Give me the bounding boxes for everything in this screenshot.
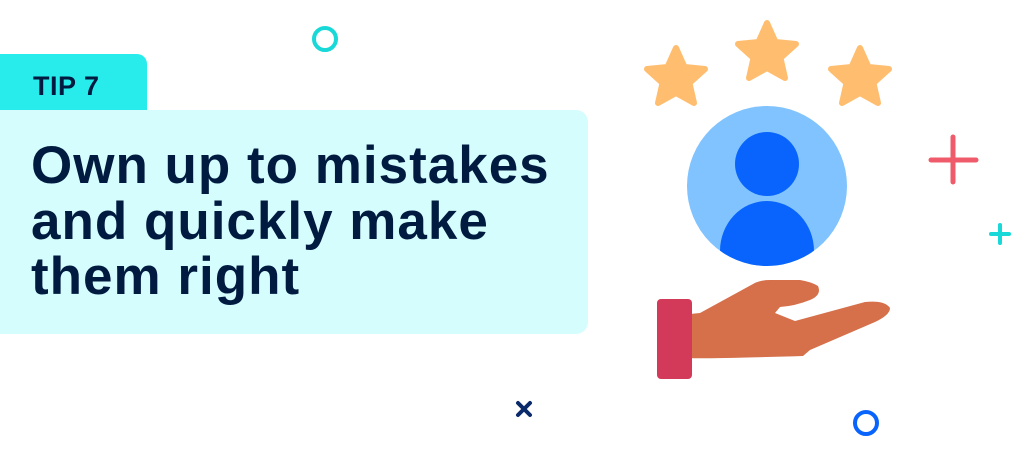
icon: hand xyxy=(657,280,890,379)
decoration: navy x xyxy=(518,403,530,415)
tab: tip 7 xyxy=(0,54,147,112)
icon: stars xyxy=(647,23,889,103)
decoration: teal ring xyxy=(314,28,336,50)
title: Own up to mistakes xyxy=(31,136,550,195)
title: and quickly make xyxy=(31,192,489,250)
icon: user avatar xyxy=(687,106,847,280)
decoration: blue ring xyxy=(855,412,877,434)
title xyxy=(31,136,550,306)
decoration: cyan plus xyxy=(991,225,1009,243)
panel: title xyxy=(0,110,588,334)
tab: tip 7: TIP 7 xyxy=(33,71,100,101)
title: them right xyxy=(31,247,300,306)
decoration: red plus xyxy=(931,137,976,182)
